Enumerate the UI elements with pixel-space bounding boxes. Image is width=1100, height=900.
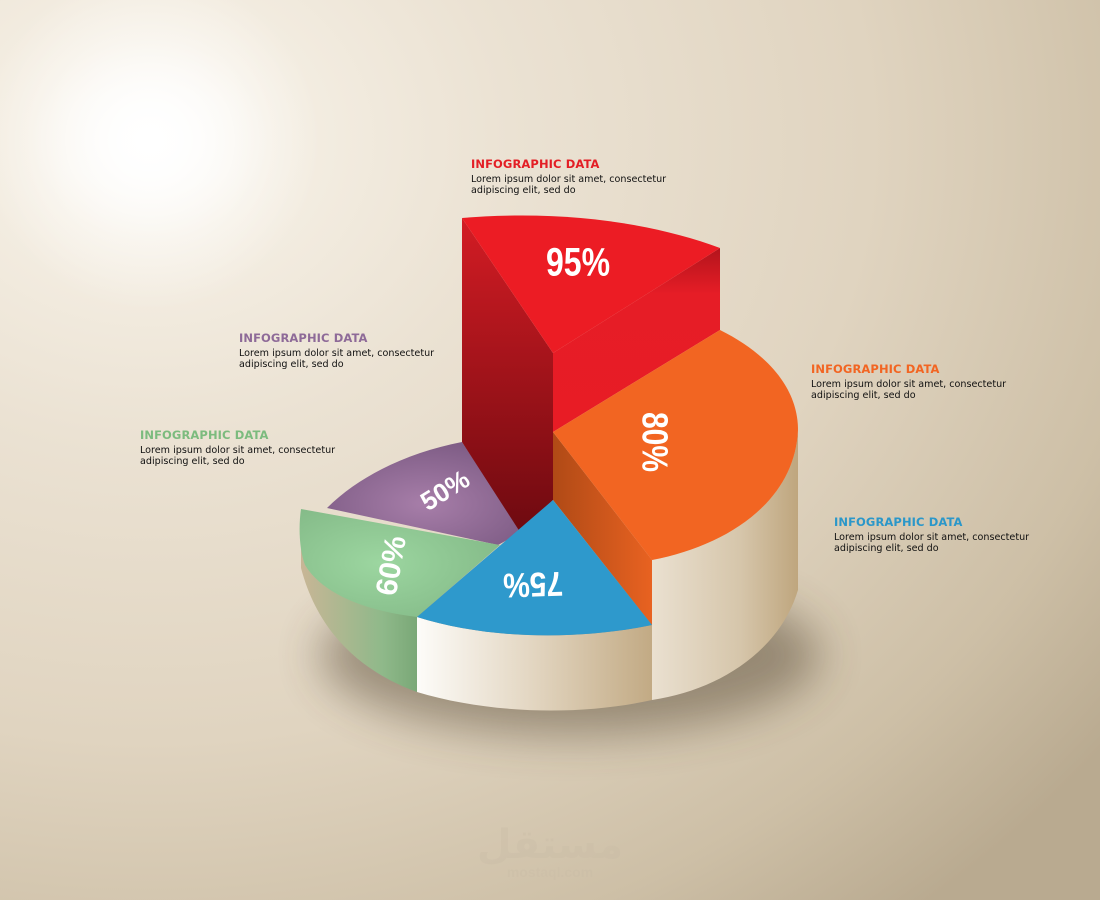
label: blue: INFOGRAPHIC DATA bbox=[834, 515, 963, 529]
green slice: 60% bbox=[370, 533, 413, 598]
label: red: adipiscing elit, sed do bbox=[471, 185, 576, 196]
label: red: INFOGRAPHIC DATA bbox=[471, 157, 600, 171]
label: green: adipiscing elit, sed do bbox=[140, 456, 245, 467]
label: purple: adipiscing elit, sed do bbox=[239, 359, 344, 370]
purple slice: 50% bbox=[415, 464, 475, 517]
green side bbox=[301, 548, 417, 692]
blue slice: 75% bbox=[502, 564, 564, 605]
label: purple bbox=[239, 331, 434, 370]
label: green bbox=[140, 428, 336, 467]
label: orange bbox=[811, 362, 1006, 401]
red slice block: 95% bbox=[546, 239, 610, 284]
pie chart bbox=[300, 216, 798, 710]
orange slice: 80% bbox=[634, 412, 674, 472]
blue slice bbox=[417, 500, 652, 710]
orange slice bbox=[553, 330, 798, 700]
label: blue: adipiscing elit, sed do bbox=[834, 543, 939, 554]
label: blue: Lorem ipsum dolor sit amet, consectetur bbox=[834, 532, 1029, 543]
watermark: mostaql.com bbox=[507, 864, 593, 880]
label: orange: INFOGRAPHIC DATA bbox=[811, 362, 940, 376]
purple slice bbox=[327, 442, 522, 545]
red slice block bbox=[462, 216, 720, 532]
watermark: مستقل bbox=[477, 822, 623, 868]
label: orange: Lorem ipsum dolor sit amet, consectetur bbox=[811, 379, 1006, 390]
label: purple: Lorem ipsum dolor sit amet, consectetur bbox=[239, 348, 434, 359]
label: purple: INFOGRAPHIC DATA bbox=[239, 331, 368, 345]
label: orange: adipiscing elit, sed do bbox=[811, 390, 916, 401]
label: blue bbox=[834, 515, 1030, 554]
green slice bbox=[300, 509, 500, 617]
label: green: INFOGRAPHIC DATA bbox=[140, 428, 269, 442]
label: red: Lorem ipsum dolor sit amet, consectetur bbox=[471, 174, 666, 185]
label: red bbox=[471, 157, 666, 196]
label: green: Lorem ipsum dolor sit amet, consectetur bbox=[140, 445, 335, 456]
shadow bbox=[320, 575, 820, 735]
